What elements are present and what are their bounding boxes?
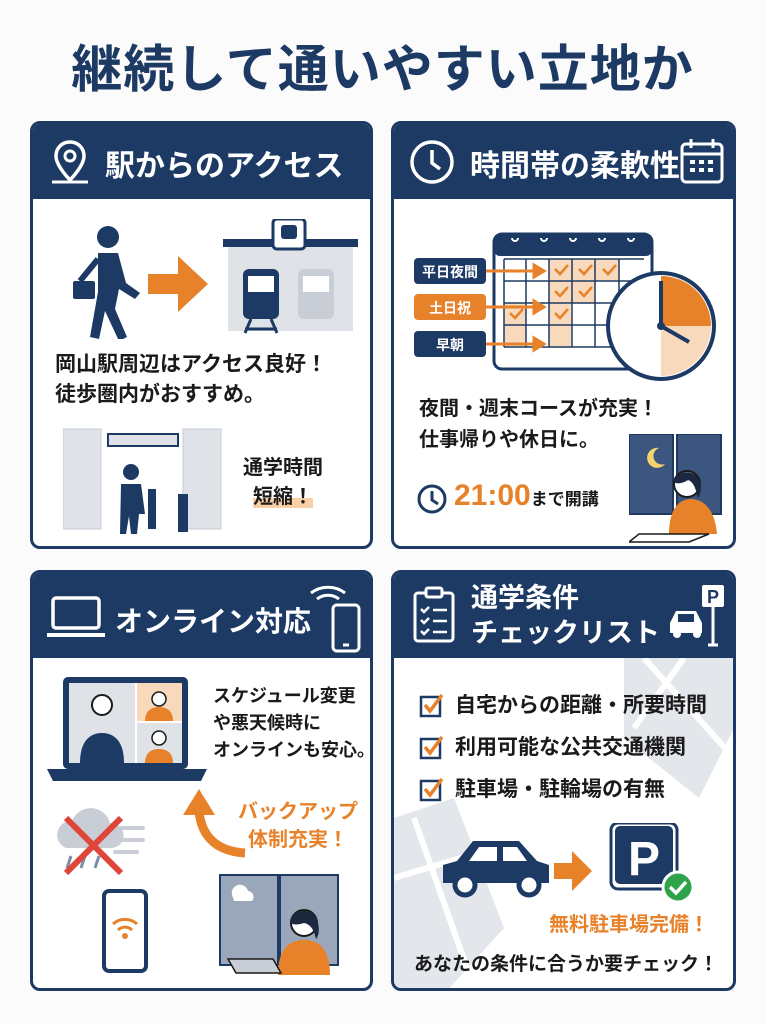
text: station access bbox=[55, 352, 327, 406]
header: station access bbox=[33, 124, 370, 199]
header: time flexibility: 時間帯の柔軟性 bbox=[470, 150, 680, 183]
illustration: car to parking bbox=[443, 823, 692, 900]
header: online support: オンライン対応 bbox=[115, 606, 311, 637]
callout: free parking: 無料駐車場完備！ bbox=[549, 914, 709, 936]
illustration: woman studying at night bbox=[629, 434, 722, 543]
icon: clipboard bbox=[414, 586, 454, 642]
text: night/weekend courses bbox=[419, 398, 658, 451]
chart: schedule calendar and clock: 平日夜間 bbox=[422, 264, 478, 280]
icon: clock bbox=[410, 140, 454, 184]
panel: time flexibility bbox=[391, 121, 736, 549]
text: schedule change: や悪天候時に bbox=[213, 713, 321, 733]
text: night/weekend courses: 仕事帰りや休日に。 bbox=[419, 429, 599, 451]
header: time flexibility bbox=[394, 124, 733, 199]
callout: backup system bbox=[238, 800, 358, 851]
icon: car and parking sign: P bbox=[707, 587, 719, 607]
text: night/weekend courses: 夜間・週末コースが充実！ bbox=[419, 398, 658, 420]
text: open until 21:00: 21:00まで開講 bbox=[454, 479, 599, 512]
header: online support bbox=[33, 573, 370, 658]
illustration: woman working on laptop bbox=[219, 874, 339, 975]
chart: schedule calendar and clock bbox=[414, 232, 716, 381]
text: schedule change bbox=[213, 686, 373, 760]
item: parking: 駐車場・駐輪場の有無 bbox=[455, 778, 665, 801]
callout: backup system: バックアップ bbox=[238, 801, 358, 823]
callout: backup system: 体制充実！ bbox=[248, 829, 348, 851]
checklist items bbox=[420, 694, 707, 802]
title: 継続して通いやすい立地か bbox=[71, 41, 694, 98]
panel: commute checklist bbox=[391, 570, 736, 991]
panel: station access bbox=[30, 121, 373, 549]
illustration: ticket gate bbox=[63, 428, 222, 534]
icon: smartphone wifi bbox=[310, 586, 360, 652]
illustration: car to parking: P bbox=[628, 833, 660, 886]
item: distance: 自宅からの距離・所要時間 bbox=[455, 694, 707, 717]
header: checklist: チェックリスト bbox=[471, 618, 660, 648]
header: station access: 駅からのアクセス bbox=[105, 150, 344, 183]
illustration: walker to station bbox=[73, 219, 358, 339]
chart: schedule calendar and clock: 早朝 bbox=[436, 337, 464, 353]
text: station access: 徒歩圏内がおすすめ。 bbox=[55, 383, 265, 406]
item: transit: 利用可能な公共交通機関 bbox=[455, 736, 686, 759]
footer text: あなたの条件に合うか要チェック！ bbox=[414, 954, 718, 975]
icon: bad weather crossed bbox=[57, 808, 145, 876]
background map pattern bbox=[394, 658, 733, 988]
text: schedule change: オンラインも安心。 bbox=[213, 740, 373, 760]
callout: shortened commute: 短縮！ bbox=[253, 486, 313, 508]
header: checklist bbox=[394, 573, 733, 658]
callout: shortened commute: 通学時間 bbox=[243, 457, 323, 479]
icon: calendar bbox=[680, 139, 724, 184]
text: station access: 岡山駅周辺はアクセス良好！ bbox=[55, 353, 327, 376]
arrow: curved orange up-left bbox=[183, 789, 246, 858]
icon: laptop bbox=[47, 596, 105, 637]
panel: online support bbox=[30, 570, 373, 991]
icon: phone wifi bbox=[102, 889, 148, 973]
icon: car and parking sign bbox=[670, 585, 724, 646]
illustration: video call laptop bbox=[47, 677, 207, 781]
text: schedule change: スケジュール変更 bbox=[213, 686, 356, 706]
icon: map pin bbox=[52, 140, 88, 184]
callout: shortened commute bbox=[243, 456, 323, 508]
header: checklist: 通学条件 bbox=[471, 583, 579, 613]
chart: schedule calendar and clock: 土日祝 bbox=[429, 300, 471, 316]
